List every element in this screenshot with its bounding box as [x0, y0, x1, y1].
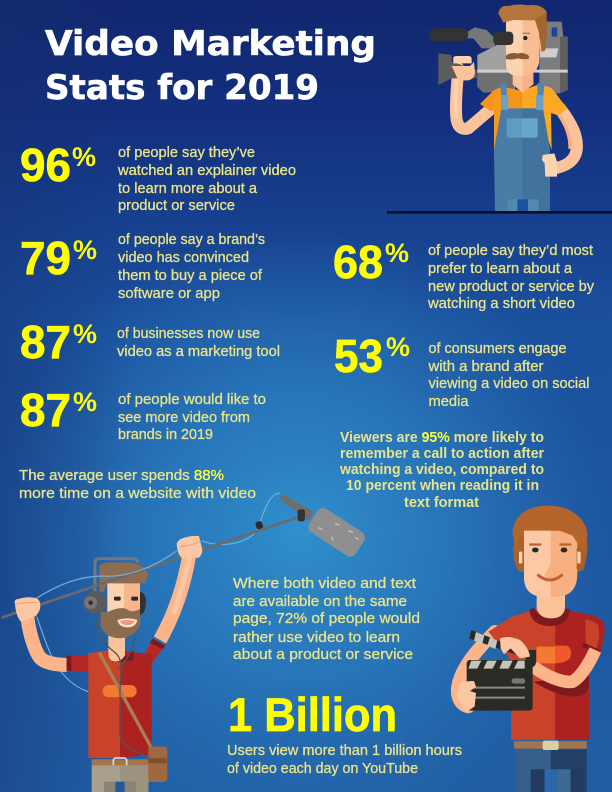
- text: call to action 95%: remember a call to action after: [340, 445, 544, 462]
- stat: 87% people: of people would like to: [118, 391, 266, 408]
- big number 1 Billion: 1 Billion: [228, 688, 397, 741]
- stat: 1 Billion: of video each day on YouTube: [227, 760, 418, 777]
- text: where both video and text: Where both video and text: [233, 575, 417, 592]
- stat: 96%: watched an explainer video: [117, 162, 296, 179]
- text: call to action 95%: Viewers are 95% more likely to: [340, 429, 544, 446]
- stat number 79%: %: [73, 235, 97, 265]
- illustration: sound engineer with boom mic: [2, 493, 367, 792]
- stat: 79%: them to buy a piece of: [118, 267, 263, 284]
- stat number 87% second: %: [73, 387, 97, 417]
- stat: 87% businesses: video as a marketing tool: [117, 343, 280, 360]
- stat number 68%: 68: [333, 236, 383, 288]
- text: where both video and text: about a product or service: [233, 646, 413, 663]
- stat number 68%: %: [385, 238, 409, 268]
- stat number 96%: 96: [20, 139, 71, 191]
- stat number 87% second: 87: [20, 384, 71, 436]
- stat: 87% businesses: [20, 316, 280, 368]
- stat: 87% people: [20, 384, 266, 443]
- stat: 96%: to learn more about a: [118, 180, 258, 197]
- stat number 87%: [20, 316, 97, 368]
- stat number 87%: %: [73, 319, 97, 349]
- stat: 79%: [20, 231, 265, 302]
- title: [45, 24, 376, 108]
- stat number 53%: %: [386, 332, 410, 362]
- text: where both video and text: are available on the same: [233, 593, 407, 610]
- stat number 68%: [333, 236, 409, 288]
- stat: 1 Billion: Users view more than 1 billion hours: [227, 742, 462, 759]
- stat: 68%: of people say they’d most: [428, 242, 594, 259]
- stat: 53%: of consumers engage: [428, 340, 566, 357]
- text: call to action 95%: [339, 429, 544, 511]
- stat: 87% people: brands in 2019: [118, 426, 213, 443]
- stat: 79%: video has convinced: [118, 249, 249, 266]
- stat: 68%: watching a short video: [427, 295, 575, 312]
- text: average user 88%: [19, 467, 256, 502]
- stat: 53%: media: [428, 393, 469, 410]
- stat: 79%: of people say a brand’s: [118, 231, 265, 248]
- text: call to action 95%: 10 percent when reading it in: [346, 477, 539, 494]
- stat: 87% businesses: of businesses now use: [117, 325, 260, 342]
- text: average user 88%: more time on a website with video: [19, 485, 256, 502]
- text: where both video and text: [233, 575, 420, 663]
- text: average user 88%: The average user spends 88%: [19, 467, 224, 484]
- title: Video Marketing: [45, 24, 376, 64]
- stat number 53%: [334, 330, 410, 382]
- stat number 53%: 53: [334, 330, 383, 382]
- stat: 96%: [20, 139, 296, 214]
- stat: 68%: prefer to learn about a: [428, 260, 573, 277]
- stat number 79%: [20, 232, 97, 284]
- stat: 68%: [333, 236, 594, 312]
- stat number 79%: 79: [20, 232, 71, 284]
- stat number 87%: 87: [20, 316, 71, 368]
- text: call to action 95%: watching a video, compared to: [339, 461, 544, 478]
- text: call to action 95%: text format: [404, 494, 479, 511]
- stat number 96%: %: [72, 142, 96, 172]
- stat: 79%: software or app: [118, 285, 220, 302]
- stat: 53%: with a brand after: [428, 358, 544, 375]
- divider line: [387, 211, 612, 214]
- title: Stats for 2019: [45, 68, 319, 108]
- stat: 53%: [334, 330, 590, 410]
- stat: 1 Billion: [227, 688, 462, 777]
- illustration: cameraman: [429, 4, 577, 212]
- text: where both video and text: page, 72% of people would: [233, 610, 420, 627]
- stat: 96%: of people say they’ve: [118, 144, 255, 161]
- stat: 96%: product or service: [118, 197, 235, 214]
- text: where both video and text: rather use video to learn: [233, 629, 400, 646]
- stat: 68%: new product or service by: [428, 278, 594, 295]
- stat: 87% people: see more video from: [118, 409, 250, 426]
- illustration: man with clapperboard: [457, 506, 605, 792]
- stat number 87% second: [20, 384, 97, 436]
- stat number 96%: [20, 139, 96, 191]
- stat: 53%: viewing a video on social: [428, 375, 590, 392]
